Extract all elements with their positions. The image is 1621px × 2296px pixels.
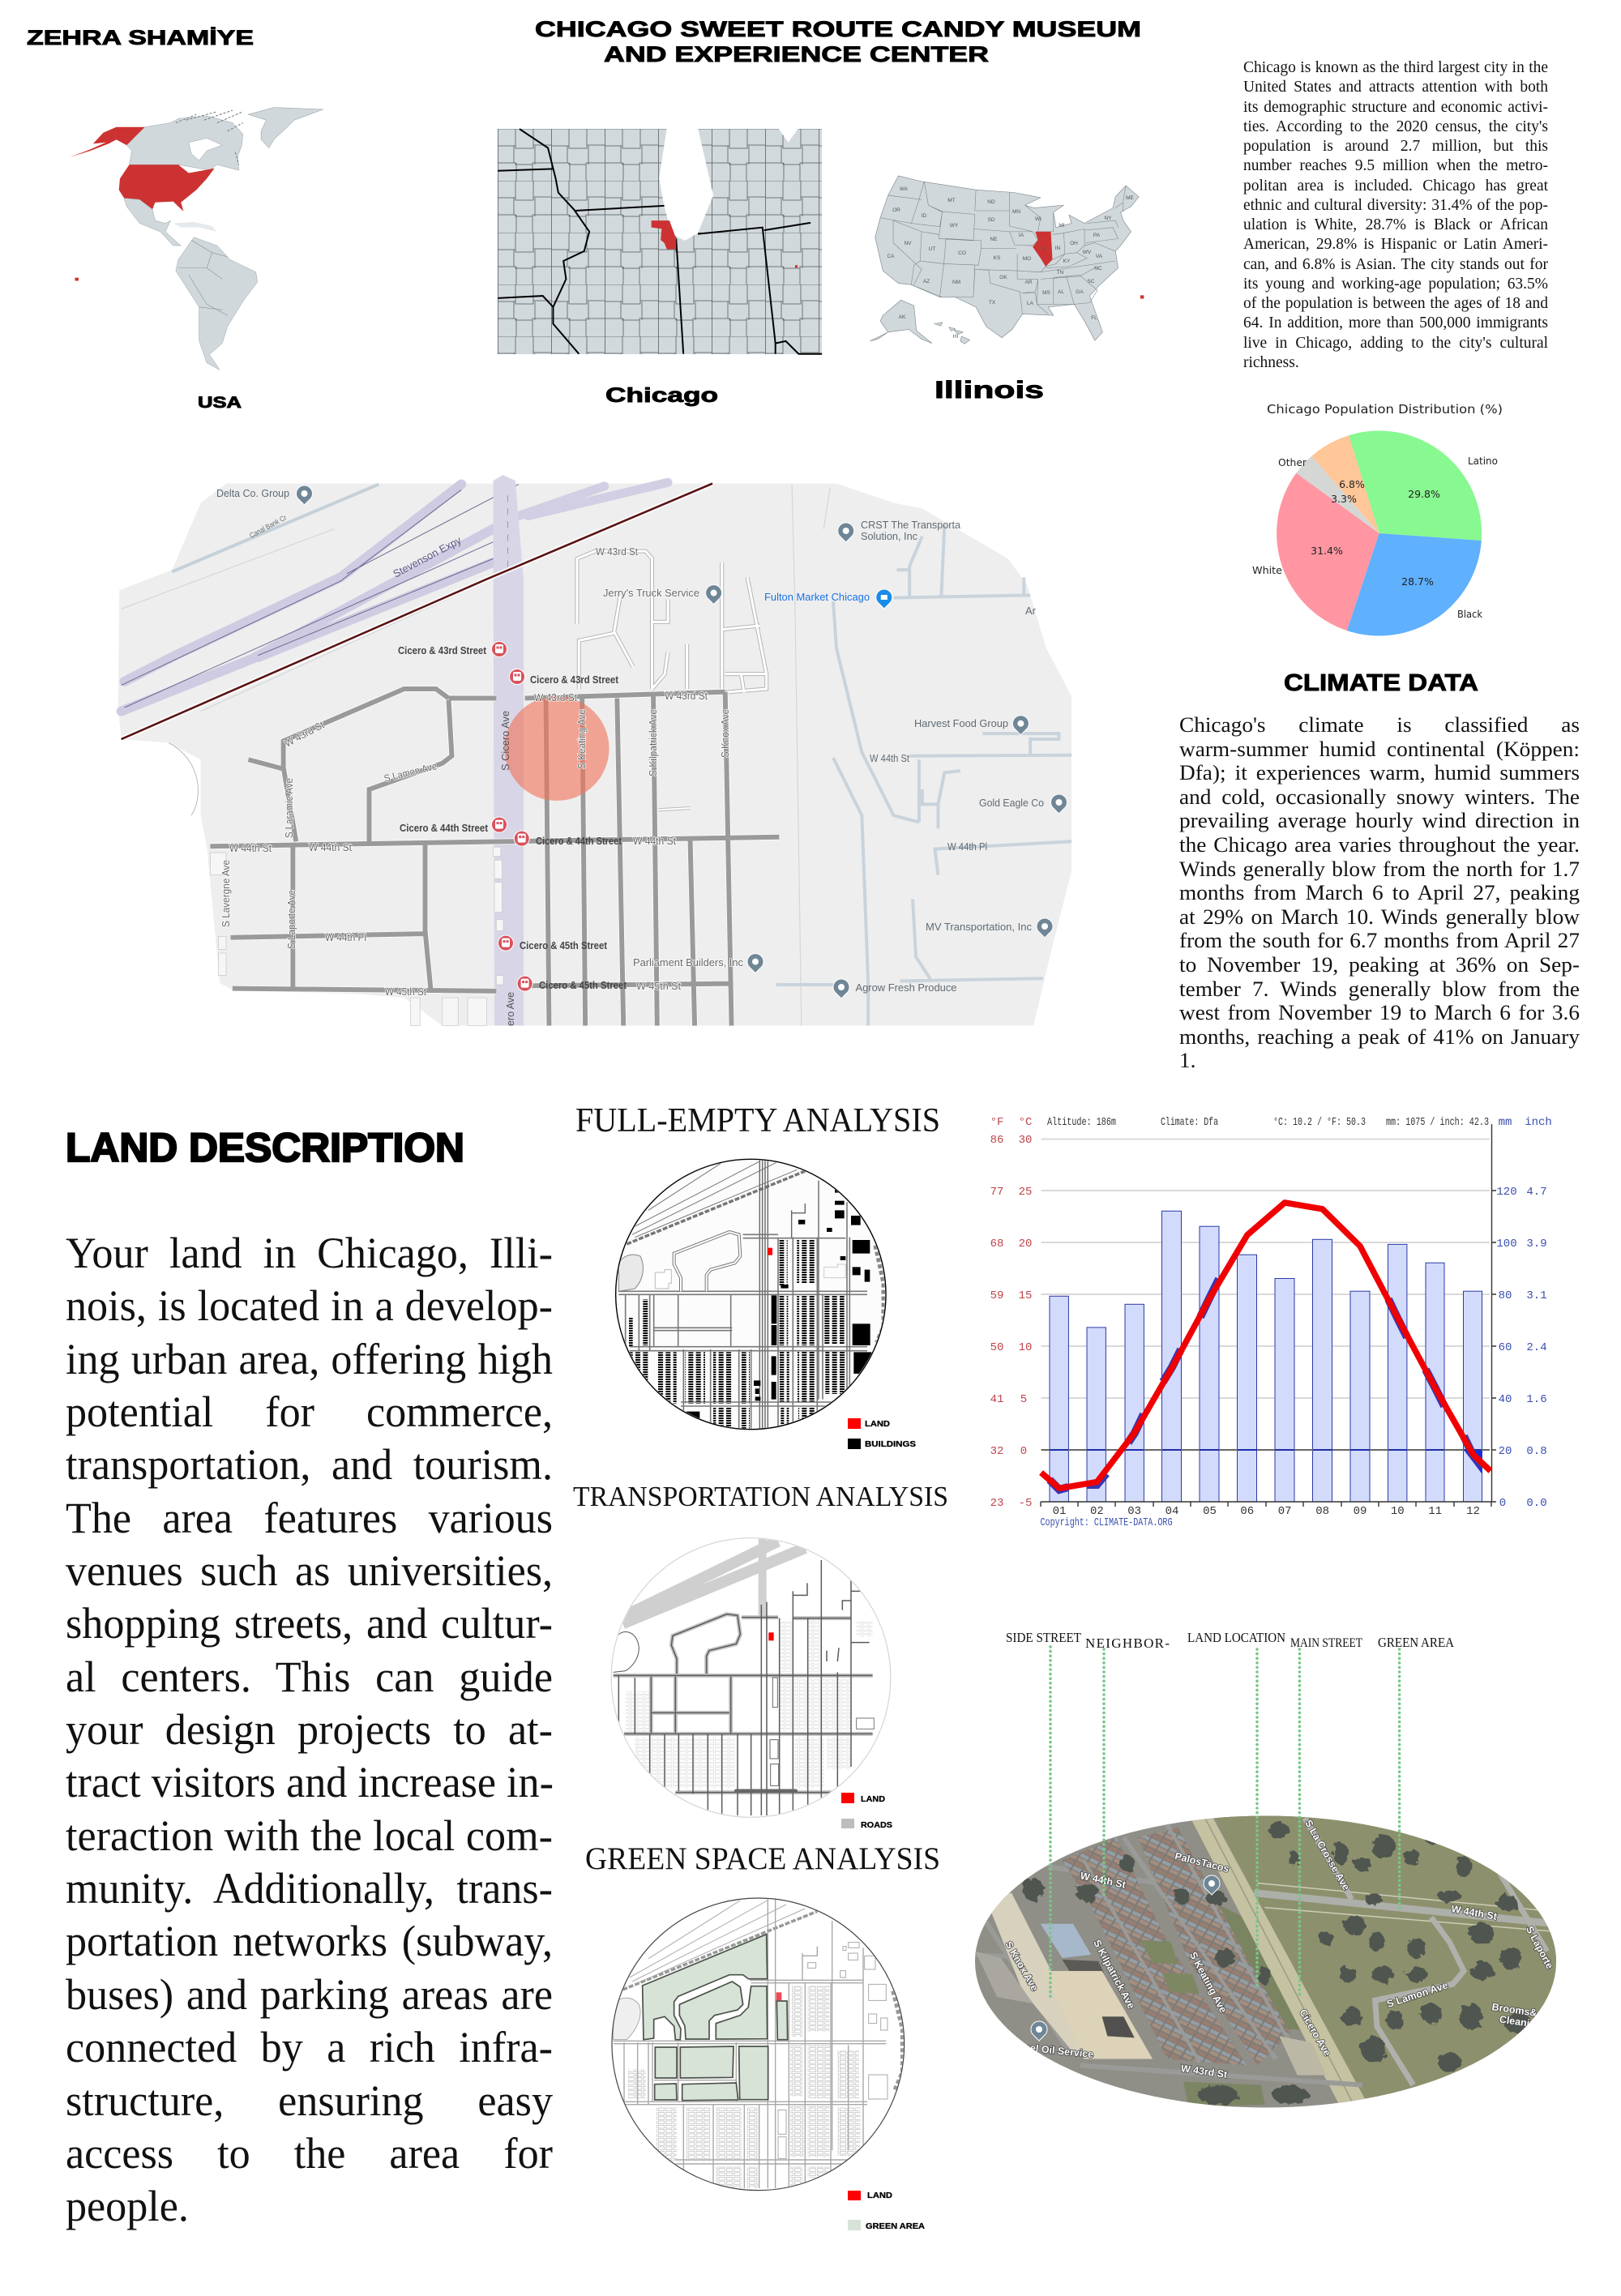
transportation analysis: [573, 1481, 948, 1830]
state labels on USA map: ID: [922, 213, 927, 219]
month labels: 12: [1466, 1505, 1480, 1518]
month labels: 02: [1090, 1505, 1104, 1518]
state labels on USA map: TN: [1057, 270, 1064, 276]
temperature and rainfall axes: 50: [990, 1341, 1003, 1354]
heading: climate data: CLIMATE DATA: [1284, 670, 1478, 696]
transportation analysis: TRANSPORTATION ANALYSIS: [573, 1481, 948, 1512]
map place labels and pins: Stevenson Expy: [391, 534, 464, 580]
pie chart: Chicago population distribution: Other: [1278, 456, 1307, 468]
aerial map labels: Cleani: [1499, 2013, 1530, 2029]
map place labels and pins: W 45th St: [385, 986, 426, 998]
text block: land description: Your land in Chicago, Illi-: [66, 1229, 553, 1277]
pie chart: Chicago population distribution: 6.8%: [1339, 478, 1365, 490]
month labels: 03: [1127, 1505, 1141, 1518]
temperature and rainfall axes: 100: [1496, 1238, 1517, 1251]
aerial map labels: S Knox Ave: [1003, 1939, 1041, 1993]
aerial map labels: Cicero Ave: [1297, 2007, 1333, 2058]
state labels on USA map: AK: [899, 314, 906, 320]
state labels on USA map: SD: [987, 217, 995, 223]
text block: climate description: from the south for 6.7 months from April 27: [1179, 928, 1580, 952]
state labels on USA map: MN: [1012, 209, 1020, 215]
month labels: 11: [1428, 1505, 1442, 1518]
state labels on USA map: AR: [1024, 280, 1033, 285]
month labels: 04: [1165, 1505, 1178, 1518]
month labels: 06: [1240, 1505, 1254, 1518]
temperature and rainfall axes: °C: 10.2 / °F: 50.3: [1273, 1116, 1366, 1129]
state labels on USA map: WI: [1035, 216, 1041, 222]
slice: White: [1277, 473, 1379, 631]
map place labels and pins: Cicero & 43rd Street: [398, 645, 487, 656]
state labels on USA map: CA: [887, 254, 895, 259]
temperature and rainfall axes: 20: [1499, 1445, 1512, 1458]
legend: green space: [848, 2191, 925, 2231]
text block: climate description: west from November 19 to March 6 for 3.6: [1179, 1000, 1580, 1024]
temperature and rainfall axes: 5: [1020, 1393, 1027, 1406]
temperature and rainfall axes: 120: [1496, 1186, 1517, 1199]
state labels on USA map: VA: [1096, 254, 1103, 259]
map place labels and pins: S Kilpatrick Ave: [648, 709, 659, 776]
temperature and rainfall axes: 10: [1019, 1341, 1032, 1354]
text block: Chicago demographics: ethnic and cultural diversity: 31.4% of the pop-: [1243, 196, 1548, 214]
legend: full-empty: [848, 1418, 916, 1449]
temperature and rainfall axes: °F: [990, 1116, 1003, 1129]
month labels: 07: [1278, 1505, 1292, 1518]
state labels on USA map: WV: [1083, 250, 1092, 255]
state labels on USA map: SC: [1087, 279, 1095, 284]
text block: climate description: to November 19, peaking at 36% on Sep-: [1179, 952, 1580, 977]
green space analysis: GREEN SPACE ANALYSIS: [585, 1841, 940, 1876]
state labels on USA map: KY: [1063, 259, 1071, 264]
aerial callout labels and dotted leader lines: MAIN STREET: [1290, 1636, 1362, 1650]
temperature and rainfall axes: mm: [1499, 1116, 1512, 1129]
state labels on USA map: [887, 186, 1135, 340]
state labels on USA map: ME: [1126, 195, 1135, 201]
aerial map labels: W 44th St: [1080, 1870, 1127, 1891]
map place labels and pins: MV Transportation, Inc: [926, 921, 1033, 933]
temperature and rainfall axes: Altitude: 186m: [1047, 1116, 1116, 1129]
temperature and rainfall axes: 0: [1499, 1497, 1506, 1510]
aerial callout labels and dotted leader lines: LAND LOCATION: [1187, 1630, 1285, 1645]
text block: climate description: Dfa); it experiences warm, humid summers: [1179, 760, 1580, 785]
legend: transportation: ROADS: [861, 1821, 892, 1830]
aerial callout labels and dotted leader lines: [1006, 1630, 1455, 1999]
aerial callout labels and dotted leader lines: SIDE STREET: [1006, 1630, 1082, 1645]
map place labels and pins: W 44th St: [870, 752, 909, 764]
temperature and rainfall axes: 2.4: [1526, 1341, 1547, 1354]
map place labels and pins: W 43rd St: [665, 691, 708, 702]
text block: Chicago demographics: Chicago is known as the third largest city in the: [1243, 58, 1548, 76]
text block: Chicago demographics: can, and 6.8% is Asian. The city stands out for: [1243, 255, 1548, 273]
temperature and rainfall axes: [990, 1116, 1552, 1510]
text block: Chicago demographics: its young and working-age population; 63.5%: [1243, 275, 1548, 293]
text block: land description: portation networks (subway,: [66, 1917, 553, 1965]
text block: climate description: Winds generally blow from the north for 1.7: [1179, 857, 1580, 881]
map place labels and pins: ero Ave: [504, 992, 516, 1026]
state labels on USA map: ND: [987, 199, 995, 205]
map place labels and pins: Harvest Food Group: [914, 717, 1008, 729]
map place labels and pins: Cicero & 44th Street: [536, 836, 622, 847]
map place labels and pins: Cicero & 44th Street: [400, 823, 489, 834]
month labels: 01: [1053, 1505, 1066, 1518]
month labels: [1053, 1505, 1480, 1518]
aerial map labels: S Kilpatrick Ave: [1091, 1938, 1137, 2011]
state labels on USA map: MT: [947, 198, 956, 203]
title: CHICAGO SWEET ROUTE CANDY MUSEUM: [535, 17, 1141, 41]
state labels on USA map: FL: [1091, 315, 1097, 321]
temperature and rainfall axes: 25: [1019, 1186, 1032, 1199]
slice: Latino: [1349, 431, 1482, 541]
climate chart: [990, 1116, 1552, 1529]
text block: climate description: tember 7. Winds generally blow from the: [1179, 977, 1580, 1001]
text block: Chicago demographics: live in Chicago, adding to the city's cultural: [1243, 334, 1548, 352]
pie chart: Chicago population distribution: Black: [1457, 608, 1483, 620]
site location street map: [118, 475, 1071, 1026]
pie chart: Chicago population distribution: 28.7%: [1401, 575, 1434, 588]
map place labels and pins: W 43rd St: [534, 692, 577, 703]
aerial map labels: S La Crosse Ave: [1302, 1818, 1352, 1892]
text block: land description: tract visitors and increase in-: [66, 1758, 554, 1806]
map place labels and pins: W 44th St: [309, 842, 353, 853]
temperature and rainfall axes: 0: [1020, 1445, 1027, 1458]
full-empty analysis: [575, 1102, 940, 1449]
map place labels and pins: W 45th St: [636, 981, 682, 992]
state labels on USA map: HI: [953, 334, 958, 340]
month labels: 09: [1354, 1505, 1367, 1518]
map place labels and pins: Cicero & 43rd Street: [530, 674, 619, 686]
month labels: 10: [1391, 1505, 1405, 1518]
slice: Asian: [1311, 435, 1379, 533]
temperature and rainfall axes: 32: [990, 1445, 1003, 1458]
temperature and rainfall axes: 80: [1499, 1289, 1512, 1302]
text block: Chicago demographics: number reaches 9.5 million when the metro-: [1243, 156, 1548, 174]
author name: ZEHRA SHAMİYE: [27, 27, 254, 49]
map place labels and pins: S Lamon Ave: [383, 760, 438, 785]
heading: land description: LAND DESCRIPTION: [66, 1125, 464, 1170]
map place labels and pins: Canal Bank Cr: [248, 513, 288, 540]
text block: climate description: and cold, occasionally snowy winters. The: [1179, 785, 1580, 809]
pie chart: Chicago population distribution: [1252, 402, 1503, 635]
state labels on USA map: IL: [1041, 246, 1046, 251]
text block: climate description: [1179, 712, 1580, 1072]
temperature and rainfall axes: -5: [1019, 1497, 1032, 1510]
state labels on USA map: NM: [952, 280, 960, 285]
text block: Chicago demographics: 64. In addition, more than 500,000 immigrants: [1243, 314, 1548, 331]
pie chart: Chicago population distribution: Latino: [1468, 455, 1498, 467]
map place labels and pins: Jerry's Truck Service: [603, 588, 699, 599]
legend: transportation: LAND: [861, 1795, 885, 1804]
temperature and rainfall axes: Climate: Dfa: [1161, 1116, 1218, 1129]
climate chart: Copyright: CLIMATE-DATA.ORG: [1041, 1516, 1172, 1529]
month labels: 08: [1315, 1505, 1329, 1518]
text block: Chicago demographics: of the population is between the ages of 18 and: [1243, 294, 1548, 312]
map place labels and pins: Cicero & 45th Street: [539, 980, 627, 991]
state labels on USA map: LA: [1027, 301, 1034, 306]
aerial map labels: S Keating Ave: [1187, 1950, 1229, 2015]
state labels on USA map: IN: [1055, 246, 1061, 251]
rainfall bars: [1050, 1211, 1482, 1502]
state labels on USA map: WA: [900, 186, 909, 192]
aerial map labels: Brooms&: [1491, 2001, 1538, 2019]
map place labels and pins: S Knox Ave: [720, 709, 731, 758]
state labels on USA map: MO: [1023, 256, 1031, 262]
text block: land description: shopping streets, and cultur-: [66, 1599, 553, 1648]
legend: full-empty: BUILDINGS: [865, 1440, 916, 1449]
text block: land description: ing urban area, offering high: [66, 1335, 553, 1383]
text block: land description: people.: [66, 2182, 189, 2230]
aerial site photo ellipse: [975, 1815, 1556, 2107]
state labels on USA map: AZ: [923, 279, 930, 284]
map place labels and pins: S Laporte Ave: [286, 890, 297, 949]
aerial map labels: Steel Oil Service: [1014, 2041, 1094, 2060]
aerial callout labels and dotted leader lines: GREEN AREA: [1378, 1635, 1455, 1650]
text block: climate description: months, reaching a peak of 41% on January: [1179, 1024, 1580, 1049]
map place labels and pins: W 44th St: [229, 843, 272, 854]
legend: full-empty: LAND: [865, 1420, 890, 1429]
text block: climate description: 1.: [1179, 1048, 1195, 1072]
state labels on USA map: NY: [1104, 216, 1112, 221]
text block: Chicago demographics: politan area is included. Chicago has great: [1243, 177, 1548, 195]
aerial callout labels and dotted leader lines: NEIGHBOR-: [1085, 1635, 1170, 1651]
map label: Illinois: Illinois: [935, 377, 1044, 404]
text block: climate description: prevailing average hourly wind direction in: [1179, 808, 1580, 832]
aerial map labels: W 43rd St: [1180, 2063, 1229, 2080]
text block: Chicago demographics: richness.: [1243, 353, 1299, 371]
aerial map labels: PalosTacos: [1174, 1850, 1230, 1875]
temperature and rainfall axes: 3.1: [1526, 1289, 1547, 1302]
text block: land description: buses) and parking areas are: [66, 1970, 553, 2019]
text block: land description: potential for commerce,: [66, 1387, 553, 1436]
map place labels and pins: W 44th Pl: [947, 840, 987, 853]
map place labels and pins: Ar: [1025, 605, 1037, 617]
map place labels and pins: W 44th St: [633, 836, 677, 847]
text block: land description: munity. Additionally, trans-: [66, 1864, 553, 1913]
map place labels and pins: [216, 485, 1067, 1026]
temperature and rainfall axes: 0.0: [1526, 1497, 1547, 1510]
state labels on USA map: KS: [994, 255, 1001, 261]
title: [535, 17, 1141, 66]
temperature and rainfall axes: 3.9: [1526, 1238, 1547, 1251]
slice: Other: [1296, 456, 1379, 533]
pie chart: Chicago population distribution: White: [1252, 564, 1282, 576]
text block: Chicago demographics: population is around 2.7 million, but this: [1243, 137, 1548, 155]
map place labels and pins: S Keating Ave: [576, 709, 588, 769]
temperature and rainfall axes: 40: [1499, 1393, 1512, 1406]
legend: green space: GREEN AREA: [866, 2222, 925, 2231]
map place labels and pins: S Lavergne Ave: [220, 860, 232, 927]
title: AND EXPERIENCE CENTER: [604, 42, 989, 66]
state labels on USA map: GA: [1076, 289, 1084, 295]
text block: land description: structure, ensuring easy: [66, 2076, 553, 2125]
slice: Black: [1347, 533, 1482, 635]
text block: climate description: warm-summer humid continental (Köppen:: [1179, 737, 1580, 761]
aerial map labels: W 44th St: [1450, 1903, 1499, 1922]
temperature and rainfall axes: 1.6: [1526, 1393, 1547, 1406]
temperature and rainfall axes: 0.8: [1526, 1445, 1547, 1458]
text block: land description: your design projects to at-: [66, 1705, 553, 1754]
text block: climate description: months from March 6 to April 27, peaking: [1179, 880, 1580, 904]
temperature and rainfall axes: 30: [1019, 1134, 1032, 1147]
map place labels and pins: Gold Eagle Co: [979, 797, 1044, 809]
temperature and rainfall axes: 15: [1019, 1289, 1032, 1302]
map: USA with Illinois highlighted: [870, 176, 1144, 344]
temperature and rainfall axes: 4.7: [1526, 1186, 1547, 1199]
aerial map labels: S Laporte: [1524, 1924, 1555, 1971]
temperature line: [1041, 1203, 1491, 1488]
highlighted land circle: [504, 696, 609, 801]
text block: climate description: Chicago's climate is classified as: [1179, 712, 1580, 737]
text block: land description: [66, 1229, 554, 2230]
full-empty analysis: FULL-EMPTY ANALYSIS: [575, 1102, 940, 1139]
map place labels and pins: S Cicero Ave: [499, 711, 511, 771]
aerial map labels: S Lamon Ave: [1385, 1979, 1449, 2010]
pie chart: Chicago population distribution: Chicago Population Distribution (%): [1267, 402, 1503, 417]
temperature and rainfall axes: 59: [990, 1289, 1003, 1302]
text block: Chicago demographics: its demographic structure and economic activi-: [1243, 98, 1548, 116]
text block: Chicago demographics: American, 29.8% is Hispanic or Latin Ameri-: [1243, 235, 1548, 253]
pie chart: Chicago population distribution: 3.3%: [1331, 493, 1357, 505]
state labels on USA map: MS: [1042, 290, 1051, 296]
legend: transportation: [841, 1793, 892, 1830]
temperature and rainfall axes: inch: [1525, 1116, 1552, 1129]
state labels on USA map: OK: [999, 275, 1007, 280]
temperature and rainfall axes: 20: [1019, 1238, 1032, 1251]
map label: USA: USA: [198, 395, 242, 412]
state labels on USA map: CO: [958, 250, 966, 256]
legend: green space: LAND: [867, 2191, 892, 2200]
map place labels and pins: Fulton Market Chicago: [764, 591, 870, 603]
state labels on USA map: OR: [892, 207, 900, 213]
state labels on USA map: AL: [1058, 289, 1064, 295]
state labels on USA map: NC: [1094, 266, 1102, 272]
state labels on USA map: NE: [990, 237, 998, 242]
temperature and rainfall axes: mm: 1075 / inch: 42.3: [1386, 1116, 1489, 1129]
map place labels and pins: W 44th Pl: [325, 932, 366, 943]
text block: Chicago demographics: United States and attracts attention with both: [1243, 78, 1548, 96]
text block: land description: The area features various: [66, 1494, 553, 1542]
text block: land description: teraction with the local com-: [66, 1811, 553, 1860]
text block: land description: al centers. This can guide: [66, 1653, 553, 1701]
temperature and rainfall axes: 60: [1499, 1341, 1512, 1354]
map: Americas with USA highlighted: [70, 108, 323, 370]
temperature and rainfall axes: 23: [990, 1497, 1003, 1510]
month labels: 05: [1203, 1505, 1217, 1518]
state labels on USA map: PA: [1093, 233, 1101, 238]
map label: Chicago: Chicago: [605, 384, 718, 407]
green space analysis: [585, 1841, 940, 2231]
text block: land description: transportation, and tourism.: [66, 1440, 553, 1489]
map place labels and pins: CRST The Transporta: [861, 519, 961, 531]
temperature and rainfall axes: °C: [1019, 1116, 1032, 1129]
temperature and rainfall axes: 86: [990, 1134, 1003, 1147]
map place labels and pins: W 43rd St: [596, 546, 638, 558]
text block: land description: nois, is located in a develop-: [66, 1281, 553, 1330]
aerial map labels: [1003, 1818, 1555, 2080]
map: Chicago region counties: [498, 128, 822, 354]
map place labels and pins: Parliament Builders, Inc: [633, 957, 743, 968]
temperature and rainfall axes: 41: [990, 1393, 1003, 1406]
map place labels and pins: Cicero & 45th Street: [520, 940, 608, 951]
text block: climate description: at 29% on March 10. Winds generally blow: [1179, 904, 1580, 929]
state labels on USA map: TX: [989, 300, 996, 306]
pie chart: Chicago population distribution: 29.8%: [1408, 488, 1440, 500]
text block: climate description: the Chicago area varies throughout the year.: [1179, 832, 1580, 857]
text block: land description: connected by a rich infra-: [66, 2023, 553, 2072]
state labels on USA map: NV: [904, 241, 912, 246]
state labels on USA map: OH: [1070, 241, 1078, 246]
state labels on USA map: IA: [1019, 233, 1024, 238]
text block: land description: access to the area for: [66, 2129, 553, 2178]
map place labels and pins: Solution, Inc: [861, 530, 917, 542]
map place labels and pins: S Laramie Ave: [284, 778, 295, 838]
map place labels and pins: W 43rd St: [283, 719, 327, 750]
temperature and rainfall axes: 77: [990, 1186, 1003, 1199]
text block: Chicago demographics: ulation is White, 28.7% is Black or African: [1243, 216, 1548, 233]
state labels on USA map: MI: [1059, 223, 1065, 229]
state labels on USA map: UT: [929, 246, 935, 252]
pie chart: Chicago population distribution: 31.4%: [1311, 545, 1343, 557]
temperature and rainfall axes: 68: [990, 1238, 1003, 1251]
text block: Chicago demographics: ties. According to the 2020 census, the city's: [1243, 118, 1548, 135]
text block: Chicago demographics: [1243, 58, 1548, 371]
map place labels and pins: Delta Co. Group: [216, 487, 289, 499]
state labels on USA map: WY: [950, 223, 959, 229]
map place labels and pins: Agrow Fresh Produce: [856, 981, 956, 994]
text block: land description: venues such as universities,: [66, 1546, 553, 1595]
